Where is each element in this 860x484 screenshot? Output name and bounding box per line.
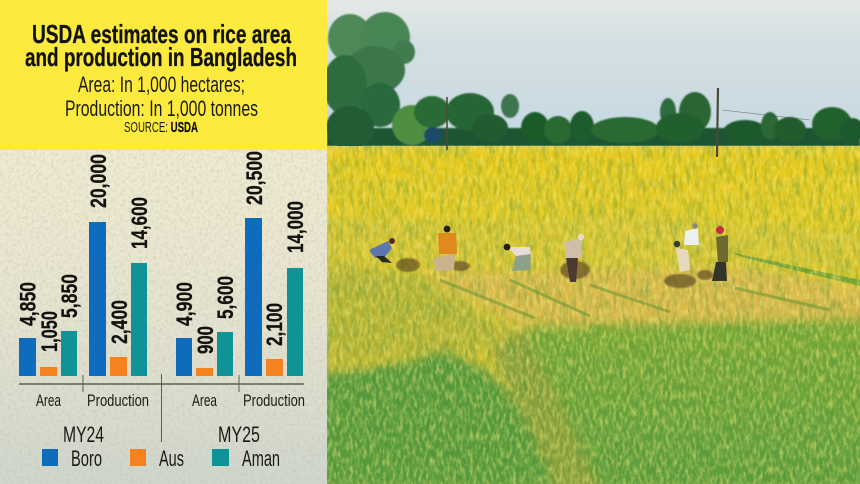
value labels MY24: 1,050 [37,311,62,352]
farmer 7 [712,226,728,281]
value labels MY25: 14,000 [283,201,308,253]
year labels: MY24 [63,422,104,447]
year labels [64,426,260,442]
value labels MY25: 20,500 [242,151,267,205]
photo: farmers harvesting rice in a paddy field [320,0,860,484]
value labels MY25 [172,151,308,354]
cut rice bundles [396,258,713,288]
mid trees [392,105,432,145]
rice texture [327,143,860,484]
farmer 1 [369,238,395,263]
category labels [36,394,304,406]
green strip at right of field [730,252,860,286]
category labels: Production [243,391,305,410]
category labels: Area [192,391,217,410]
legend: Aman [212,446,280,471]
farmer 4 [564,234,584,282]
value labels MY24: 2,400 [107,300,132,344]
category labels: Production [87,391,149,410]
value labels MY25: 5,600 [213,276,238,319]
legend: Aus [130,446,184,471]
value labels MY24: 4,850 [16,282,40,326]
tall left trees [327,13,366,58]
value labels MY25: 2,100 [262,303,287,346]
bars: Boro [19,218,262,376]
legend: Boro [42,446,102,471]
paddy field base [320,143,860,484]
units note: Production: In 1,000 tonnes [65,96,258,121]
legend [42,446,280,471]
value labels MY24: 20,000 [86,154,111,208]
source: SOURCE: USDA [124,119,198,136]
axis [19,374,304,442]
title: USDA estimates on rice area [32,19,291,49]
value labels MY24: 5,850 [57,274,82,318]
units note: Area: In 1,000 hectares; [78,72,245,97]
farmer 5 [674,241,690,272]
harvested row lines [440,280,830,318]
legend: Aus: Aus [159,446,184,471]
value labels MY24: 14,600 [127,197,152,249]
title: and production in Bangladesh [25,42,297,72]
year labels: MY25 [218,422,260,447]
value labels MY25: 4,900 [172,282,197,326]
farmer 2 [433,226,457,271]
panel: yellow header [0,0,327,150]
title [25,19,297,72]
tree line [327,11,860,146]
units note [65,72,258,121]
legend: Boro: Boro [71,446,102,471]
bars: Aman [61,263,303,376]
category labels: Area [36,391,61,410]
legend: Aman: Aman [242,446,280,471]
panel: chart background [0,150,327,484]
farmer 6 [684,223,699,245]
bars: Aus [40,357,283,376]
farmer 3 [504,244,531,271]
bar chart [16,151,308,447]
value labels MY25: 900 [193,326,218,354]
value labels MY24 [16,154,152,352]
utility poles [447,88,810,157]
sky [327,0,860,150]
